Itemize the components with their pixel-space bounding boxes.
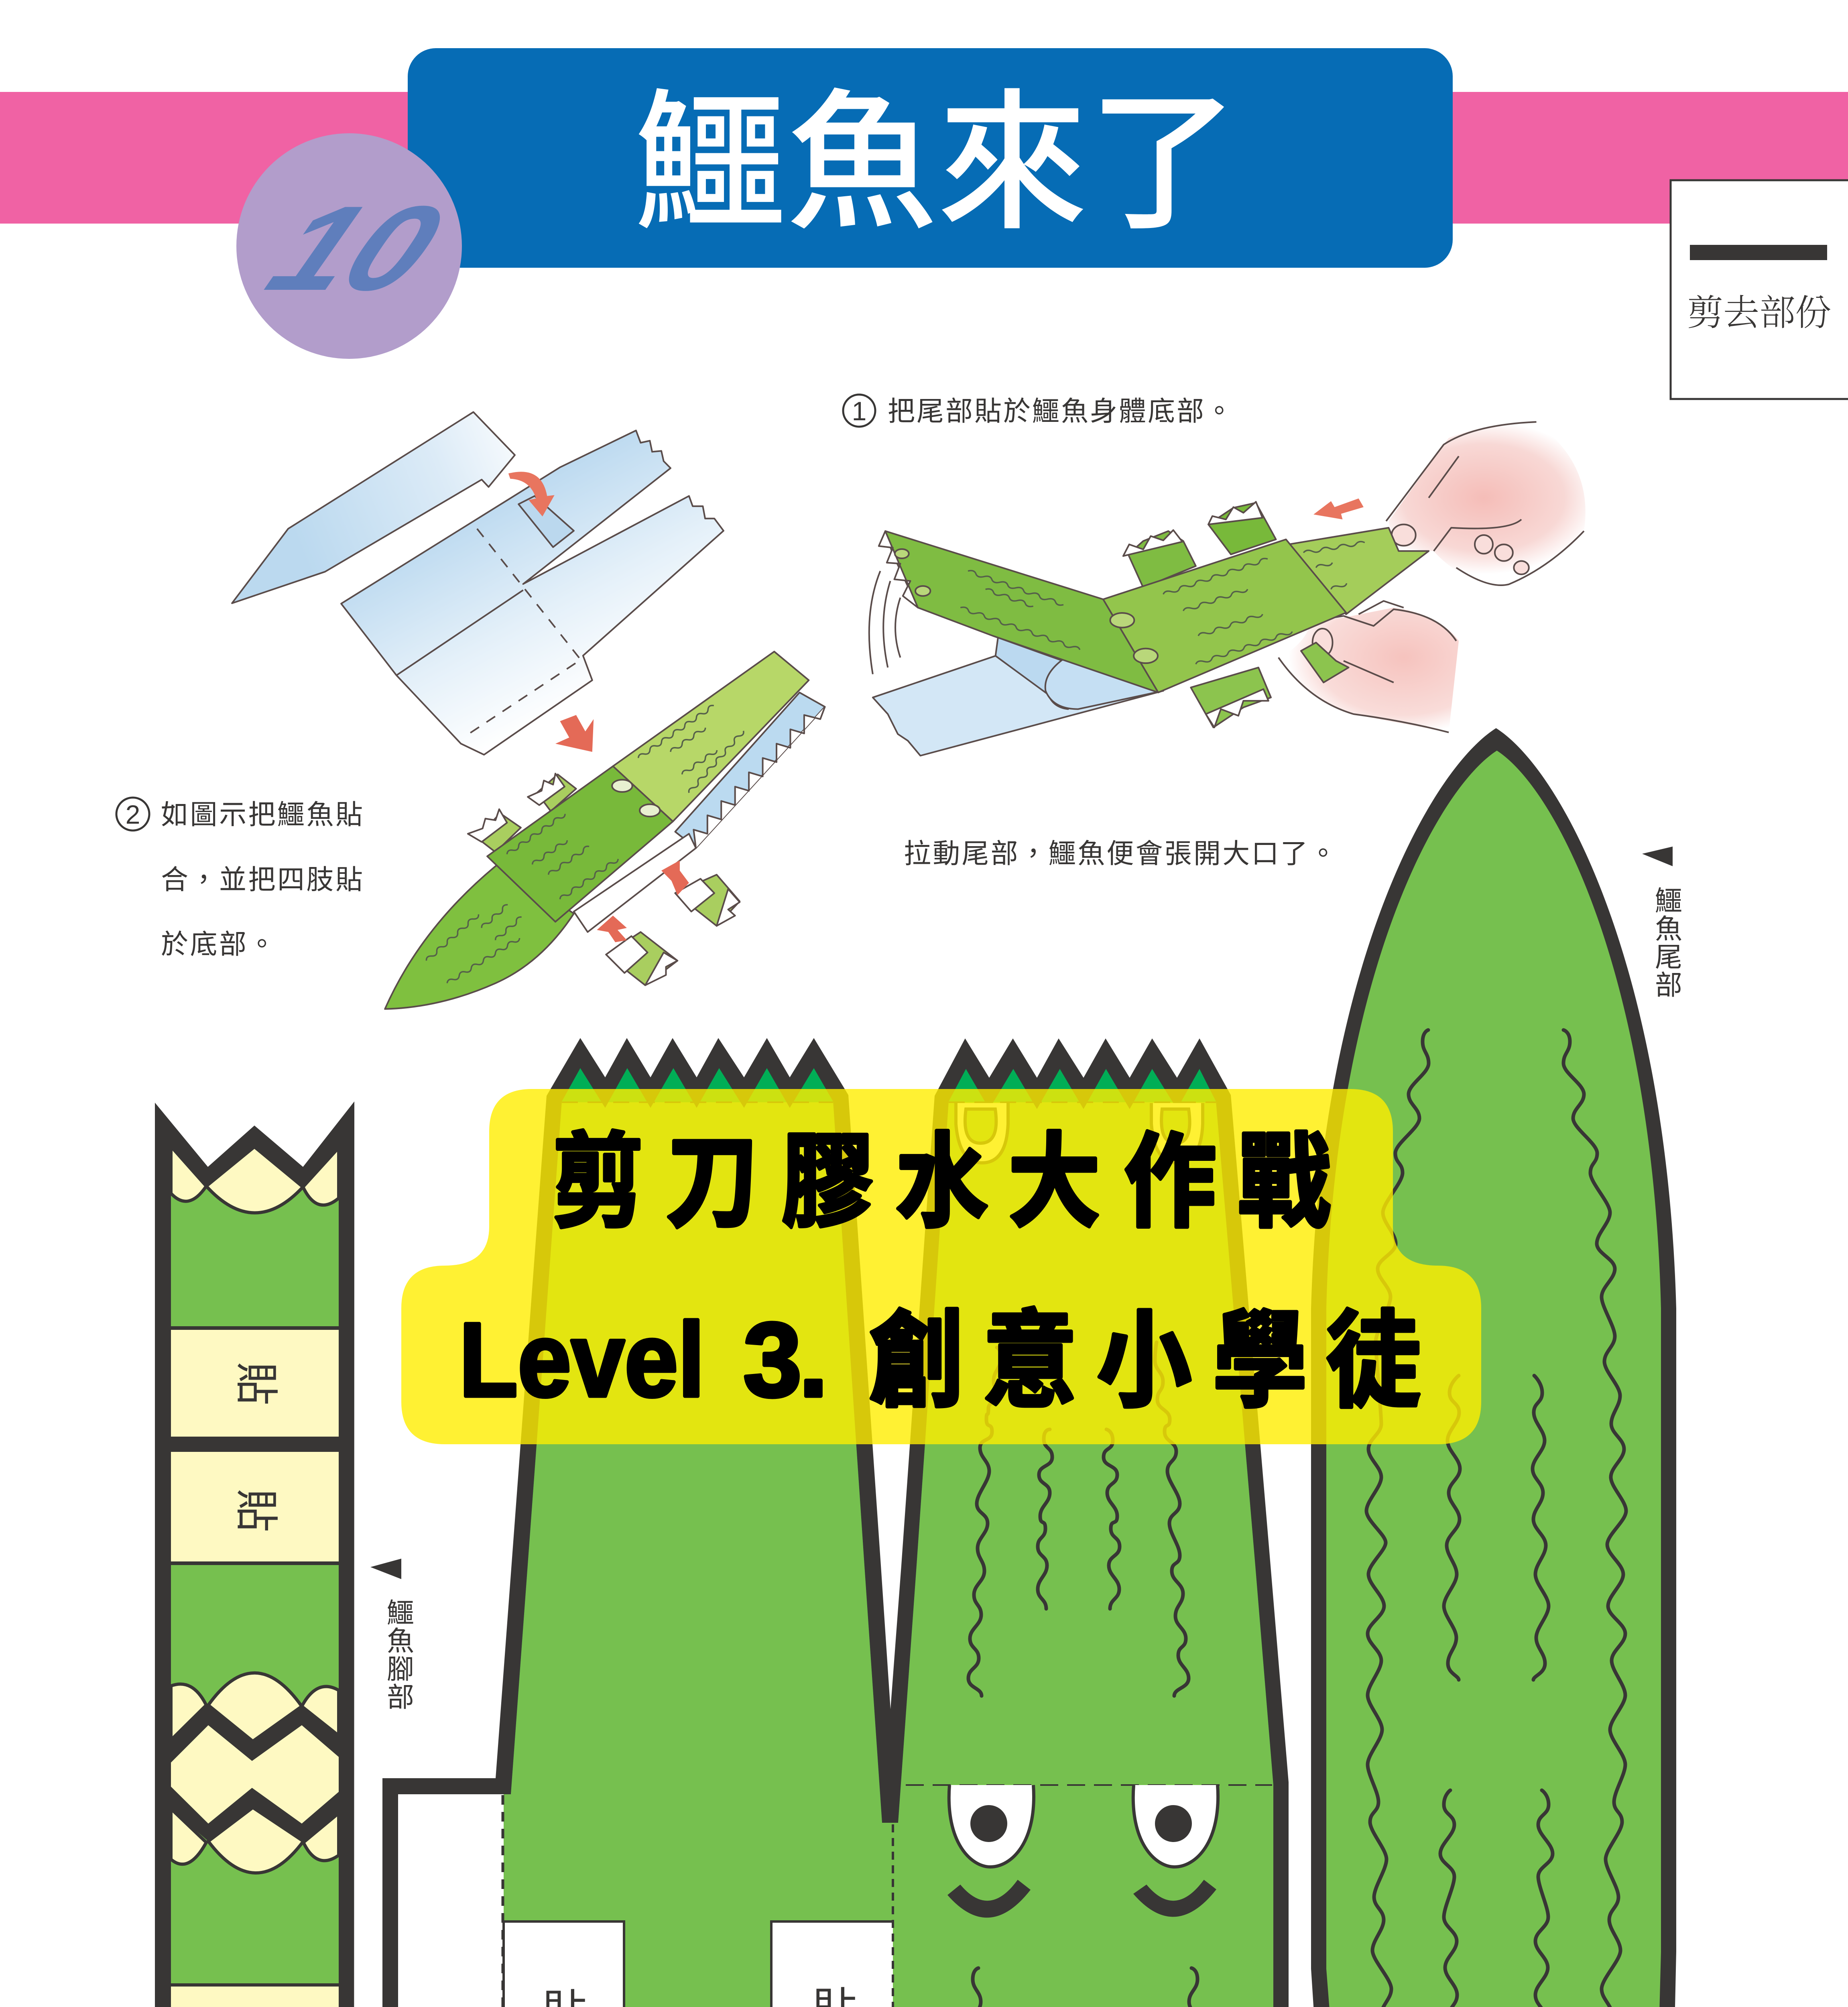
scale marks	[967, 570, 1065, 606]
banner line 2 chinese: 創意小學徒	[869, 1302, 1421, 1420]
down arrow	[555, 715, 594, 752]
step 2 number	[116, 798, 149, 830]
scale marks	[506, 812, 566, 856]
lower eyes	[949, 1785, 1034, 1867]
banner line 1: 剪刀膠水大作戰	[552, 1125, 1331, 1240]
upper eyes	[956, 1103, 1008, 1163]
upper green section	[171, 1146, 339, 1741]
overlay banner: .	[799, 1301, 828, 1419]
fold lines	[503, 1102, 1272, 2007]
crocodile body	[1103, 539, 1346, 692]
crocodile legs	[477, 813, 521, 852]
cut-out: leg strip: 貼	[232, 1489, 281, 1532]
crocodile body	[487, 766, 673, 922]
header pink band	[0, 92, 1848, 224]
head scale lines	[968, 1347, 1001, 1696]
top hand	[1389, 423, 1586, 584]
chapter number badge	[236, 133, 462, 359]
step 1 number	[843, 395, 875, 427]
title: 鱷魚來了	[635, 79, 1239, 248]
green skin	[504, 1068, 1273, 2007]
small arrows	[661, 860, 689, 895]
cut-out: crocodile body and head	[382, 1038, 1289, 2007]
title panel	[408, 48, 1453, 268]
blue paper	[873, 656, 1163, 756]
banner line 2 latin: Level	[459, 1301, 705, 1419]
crocodile tail	[1289, 528, 1429, 614]
glue tabs	[171, 1326, 339, 1565]
eyes	[1110, 613, 1134, 627]
motion lines	[869, 571, 901, 674]
curved arrow	[508, 472, 555, 517]
bottom hand	[1279, 608, 1459, 733]
legend: cut-away part: 剪去部份	[1687, 293, 1832, 333]
illustration: step 1 pulling the tail	[869, 422, 1586, 756]
step 2 text: 合，並把四肢貼	[161, 865, 365, 895]
folded tab	[518, 496, 574, 547]
body scale lines	[961, 1968, 981, 2007]
label: crocodile feet: 鱷魚腳部	[387, 1598, 414, 1713]
step 2 text	[161, 800, 365, 960]
tabs	[504, 1922, 893, 2007]
legend: cut-away part	[1671, 180, 1848, 399]
step 2 number: 2	[126, 800, 140, 829]
body paper	[341, 430, 724, 755]
pull arrow	[1313, 499, 1364, 519]
middle cream section	[171, 1725, 339, 1824]
cream scallops	[171, 1146, 339, 2007]
glue labels: 貼	[232, 1362, 281, 1405]
step 2 text: 於底部。	[161, 929, 277, 960]
eye marks	[947, 1880, 1031, 1917]
overlay banner	[401, 1089, 1481, 1444]
step 1 text: 把尾部貼於鱷魚身體底部。	[888, 396, 1234, 427]
crocodile tail	[385, 862, 574, 1009]
tail paper	[232, 412, 515, 603]
label: crocodile tail	[1642, 847, 1682, 1001]
eyes	[612, 780, 632, 792]
lower jaw	[675, 692, 825, 848]
step 2 text: 如圖示把鱷魚貼	[161, 800, 365, 830]
label: crocodile feet	[370, 1559, 414, 1713]
lower green section	[171, 1808, 339, 2007]
tail scale lines	[1366, 1030, 1429, 2007]
crocodile legs	[1128, 531, 1196, 588]
illustration: step 2 gluing the crocodile	[232, 412, 825, 1009]
crocodile head	[613, 651, 809, 821]
step 1 number: 1	[852, 396, 866, 426]
teeth	[504, 1068, 1273, 2007]
cut-out: crocodile tail	[1311, 728, 1676, 2007]
chapter number badge: 10	[249, 181, 462, 316]
pull instruction text: 拉動尾部，鱷魚便會張開大口了。	[904, 839, 1338, 869]
crocodile upper jaw	[885, 531, 1158, 692]
label: crocodile tail: 鱷魚尾部	[1655, 886, 1682, 1001]
cut-out: leg strip	[155, 1101, 354, 2007]
overlay banner: 3	[743, 1301, 802, 1419]
